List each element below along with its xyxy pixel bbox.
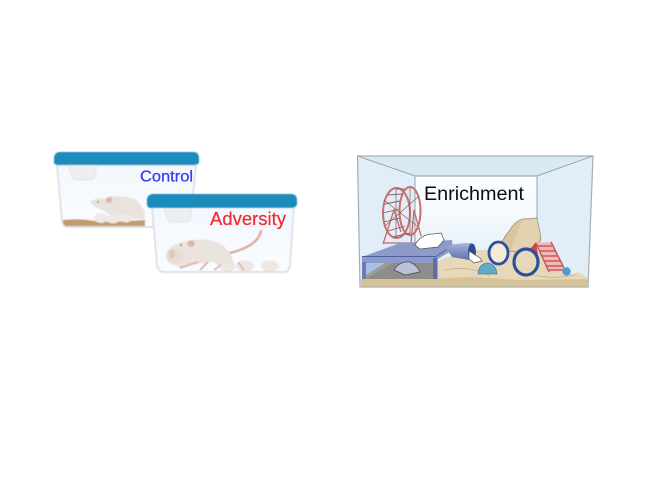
side walls and ceiling (358, 156, 593, 287)
icon: rock (498, 218, 541, 254)
platform (362, 240, 453, 279)
icon: grey mouse (394, 262, 420, 275)
panel: enrichment cage (358, 156, 593, 287)
label: Adversity: Adversity (210, 209, 286, 229)
panel: control cage (54, 152, 199, 227)
panel: adversity cage (147, 194, 297, 272)
icon: dome (478, 263, 497, 274)
icon: ball (562, 267, 571, 276)
label: Control: Control (140, 168, 193, 186)
sand floor (361, 250, 588, 286)
icon: running wheel (383, 187, 421, 244)
icon: white mouse in tunnel (469, 251, 482, 263)
icon: big tube (514, 249, 538, 275)
icon: ladder (525, 242, 564, 272)
icon: tunnel (446, 243, 475, 261)
icon: small tube (489, 242, 508, 264)
icon: white mouse on platform (415, 233, 444, 249)
label: Enrichment: Enrichment (424, 184, 525, 205)
